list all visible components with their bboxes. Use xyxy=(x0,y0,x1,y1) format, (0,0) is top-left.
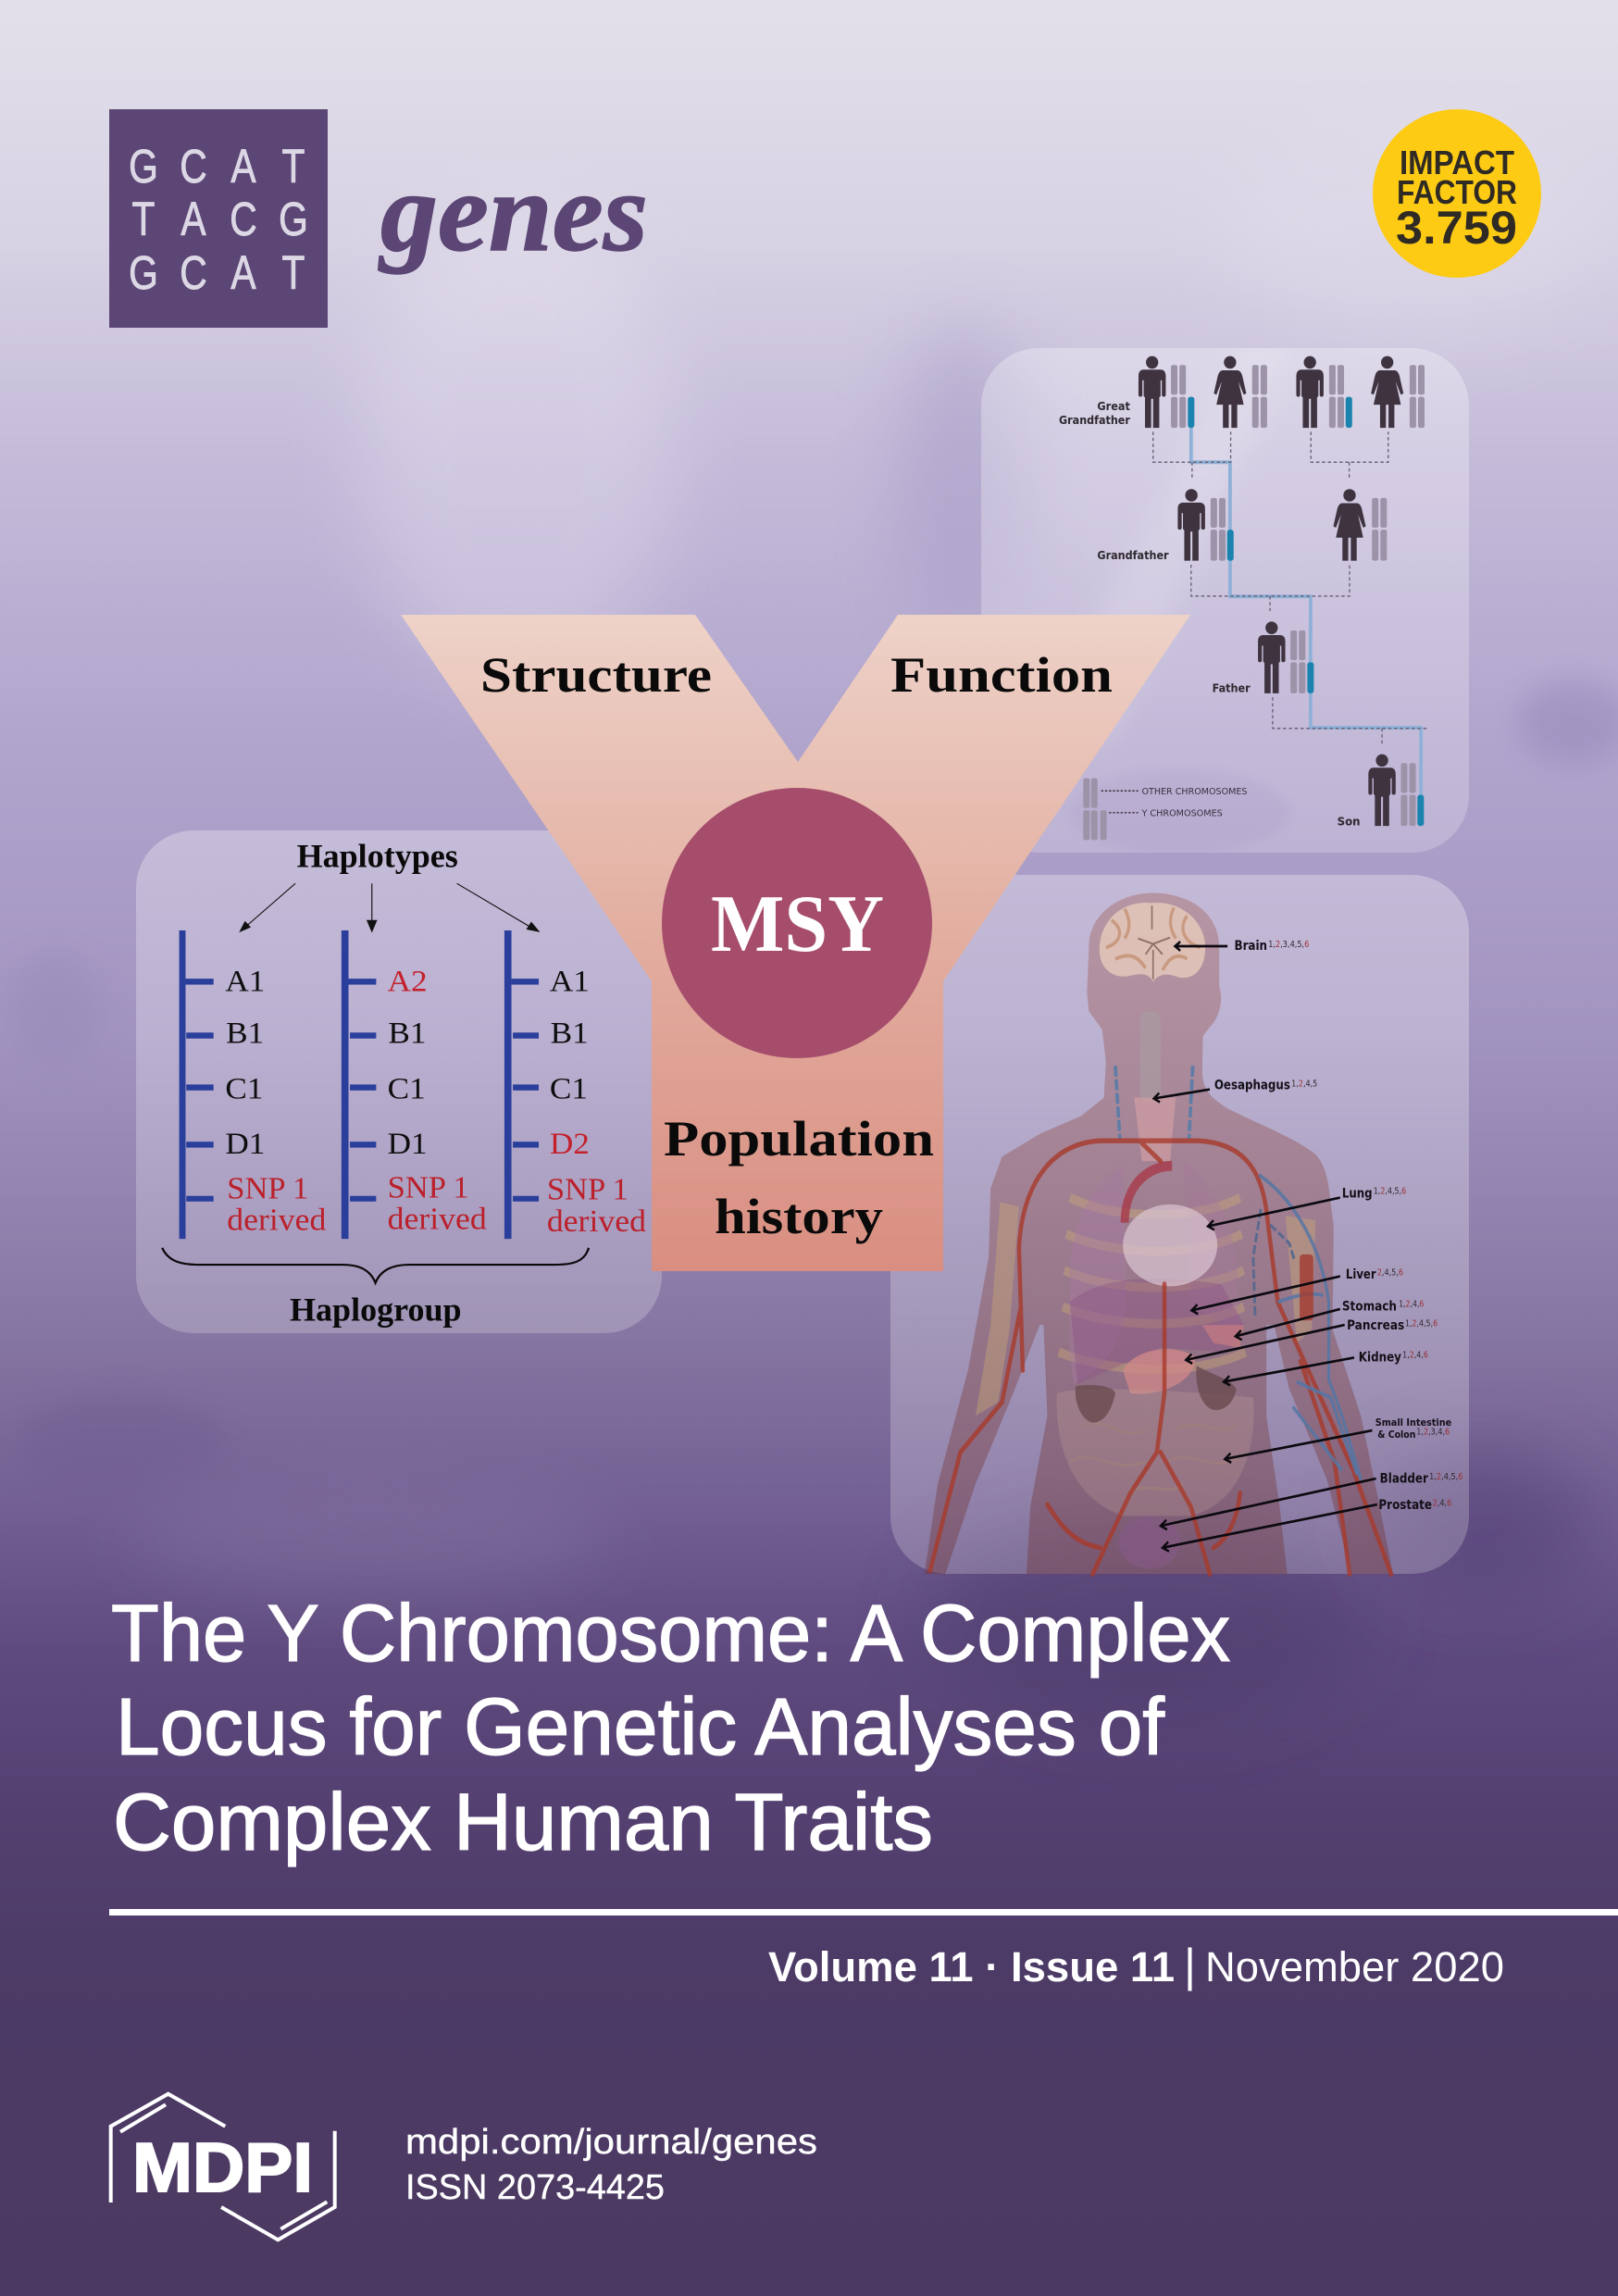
title rule xyxy=(109,1909,1618,1915)
chromosome legend: Y CHROMOSOMES xyxy=(1140,808,1223,818)
study reference superscripts: 1,2,4,5,6 xyxy=(1405,1319,1438,1329)
Y shape xyxy=(401,615,1190,1271)
Y shape labels: history xyxy=(715,1189,883,1244)
SNP labels: derived xyxy=(388,1202,487,1236)
allele labels: C1 xyxy=(550,1072,588,1105)
MSY circle: MSY xyxy=(711,880,884,969)
study reference superscripts xyxy=(1268,940,1463,1509)
study reference superscripts: 2,4,5,6 xyxy=(1377,1268,1403,1279)
thorax organs xyxy=(1070,1011,1244,1394)
panel: haplotypes and haplogroup xyxy=(136,830,662,1333)
organ labels: Brain xyxy=(1235,938,1267,953)
arm bones and ribs xyxy=(976,1198,1315,1416)
impact factor badge: IMPACT xyxy=(1400,144,1514,181)
Y shape labels xyxy=(480,647,1113,1244)
generation labels: Grandfather xyxy=(1097,549,1169,562)
generation labels: Son xyxy=(1338,815,1361,828)
MDPI logo xyxy=(111,2094,335,2240)
generation labels: Great xyxy=(1097,400,1130,413)
organ labels: Oesaphagus xyxy=(1214,1078,1290,1092)
father xyxy=(1258,621,1313,693)
logo: GCAT square: T xyxy=(282,246,305,299)
study reference superscripts: 1,2,3,4,6 xyxy=(1416,1428,1450,1438)
study reference superscripts: 1,2,4,5,6 xyxy=(1374,1187,1406,1197)
chromosome legend xyxy=(1069,769,1290,855)
study reference superscripts: 1,2,4,5,6 xyxy=(1429,1472,1463,1482)
logo: GCAT square: A xyxy=(230,246,256,299)
study reference superscripts: 1,2,4,5 xyxy=(1291,1079,1317,1090)
son xyxy=(1368,755,1424,826)
haplogroup label: Haplogroup xyxy=(290,1292,462,1329)
logo: GCAT square: G xyxy=(129,246,158,299)
organ labels: & Colon xyxy=(1377,1429,1415,1441)
generation labels: Father xyxy=(1213,681,1251,694)
journal name: genes xyxy=(378,150,648,275)
SNP labels: derived xyxy=(227,1203,327,1237)
organ labels: Small Intestine xyxy=(1375,1417,1451,1429)
impact factor badge: FACTOR xyxy=(1397,173,1517,211)
veins xyxy=(1259,1175,1361,1479)
journal URL and ISSN: ISSN 2073-4425 xyxy=(405,2168,665,2207)
logo: GCAT square: T xyxy=(132,193,155,245)
title xyxy=(111,1589,1230,1867)
generation labels xyxy=(1059,400,1361,828)
SNP labels: derived xyxy=(547,1204,646,1239)
title: Complex Human Traits xyxy=(113,1778,933,1867)
study reference superscripts: 2,4,6 xyxy=(1433,1499,1451,1509)
lymph nodes xyxy=(1253,1209,1295,1316)
allele labels: B1 xyxy=(551,1017,589,1050)
grandparents xyxy=(1177,489,1387,561)
impact factor badge: 3.759 xyxy=(1396,202,1517,254)
SNP labels xyxy=(227,1170,646,1239)
organ labels: Pancreas xyxy=(1347,1317,1404,1332)
SNP labels: SNP 1 xyxy=(388,1170,469,1204)
haplotypes heading: Haplotypes xyxy=(297,839,458,875)
Y shape labels: Function xyxy=(890,647,1113,703)
logo: GCAT square: C xyxy=(230,193,257,245)
volume line: Volume 11 · Issue 11 xyxy=(768,1943,1175,1990)
study reference superscripts: 1,2,4,6 xyxy=(1402,1351,1428,1361)
dashed family lines xyxy=(1153,431,1426,746)
organ labels xyxy=(1214,938,1451,1512)
inheritance line xyxy=(1191,428,1421,797)
allele labels: D1 xyxy=(388,1128,428,1161)
kidneys and intestines xyxy=(1056,1366,1254,1568)
journal URL and ISSN xyxy=(405,2123,817,2207)
MSY circle xyxy=(662,788,932,1058)
logo: GCAT square xyxy=(109,109,328,328)
allele labels: A1 xyxy=(550,965,590,998)
organ labels: Lung xyxy=(1342,1186,1372,1201)
allele labels: B1 xyxy=(226,1017,264,1050)
organ labels: Stomach xyxy=(1342,1298,1397,1314)
arteries xyxy=(930,1141,1391,1574)
organ labels: Prostate xyxy=(1378,1497,1432,1512)
logo: GCAT square: C xyxy=(180,140,207,193)
generation labels: Grandfather xyxy=(1059,414,1130,427)
allele labels: C1 xyxy=(388,1072,426,1105)
allele labels: A2 xyxy=(388,965,428,998)
allele labels: A1 xyxy=(225,965,265,998)
panel: human body organs xyxy=(890,875,1469,1574)
allele labels: D1 xyxy=(225,1128,265,1161)
title: Locus for Genetic Analyses of xyxy=(116,1682,1165,1772)
SNP labels: SNP 1 xyxy=(227,1171,308,1205)
brain xyxy=(1100,903,1205,981)
impact factor badge xyxy=(1373,109,1541,278)
logo: GCAT square: A xyxy=(180,193,206,245)
organ labels: Bladder xyxy=(1380,1470,1429,1486)
Y shape labels: Population xyxy=(664,1111,934,1167)
panel: pedigree of Y chromosome inheritance xyxy=(981,343,1469,855)
logo: GCAT square: T xyxy=(282,140,305,193)
study reference superscripts: 1,2,3,4,5,6 xyxy=(1268,940,1310,950)
organ labels: Liver xyxy=(1346,1267,1376,1281)
logo: GCAT square: A xyxy=(230,140,256,193)
logo: GCAT square: G xyxy=(129,140,158,193)
organ labels: Kidney xyxy=(1359,1349,1401,1365)
allele labels: B1 xyxy=(388,1017,426,1050)
allele labels xyxy=(225,965,590,1161)
arrows xyxy=(1154,942,1377,1552)
body silhouette xyxy=(925,893,1393,1574)
great grandparents xyxy=(1139,356,1425,428)
arrows to columns xyxy=(240,883,539,931)
title: The Y Chromosome: A Complex xyxy=(111,1589,1230,1678)
volume line: | xyxy=(1184,1940,1196,1991)
chromosome legend: OTHER CHROMOSOMES xyxy=(1141,787,1248,797)
allele labels: D2 xyxy=(550,1128,590,1161)
volume line: November 2020 xyxy=(1205,1943,1504,1990)
logo: GCAT square: G xyxy=(279,193,308,245)
volume line xyxy=(768,1940,1504,1991)
Y shape labels: Structure xyxy=(480,647,712,703)
journal URL and ISSN: mdpi.com/journal/genes xyxy=(405,2123,817,2162)
haplotype bars xyxy=(180,930,539,1239)
study reference superscripts: 1,2,4,6 xyxy=(1399,1300,1425,1310)
brace xyxy=(162,1248,589,1283)
logo: GCAT square: C xyxy=(180,246,207,299)
MDPI logo: MDPI xyxy=(132,2128,313,2206)
allele labels: C1 xyxy=(225,1072,263,1105)
SNP labels: SNP 1 xyxy=(547,1171,629,1206)
